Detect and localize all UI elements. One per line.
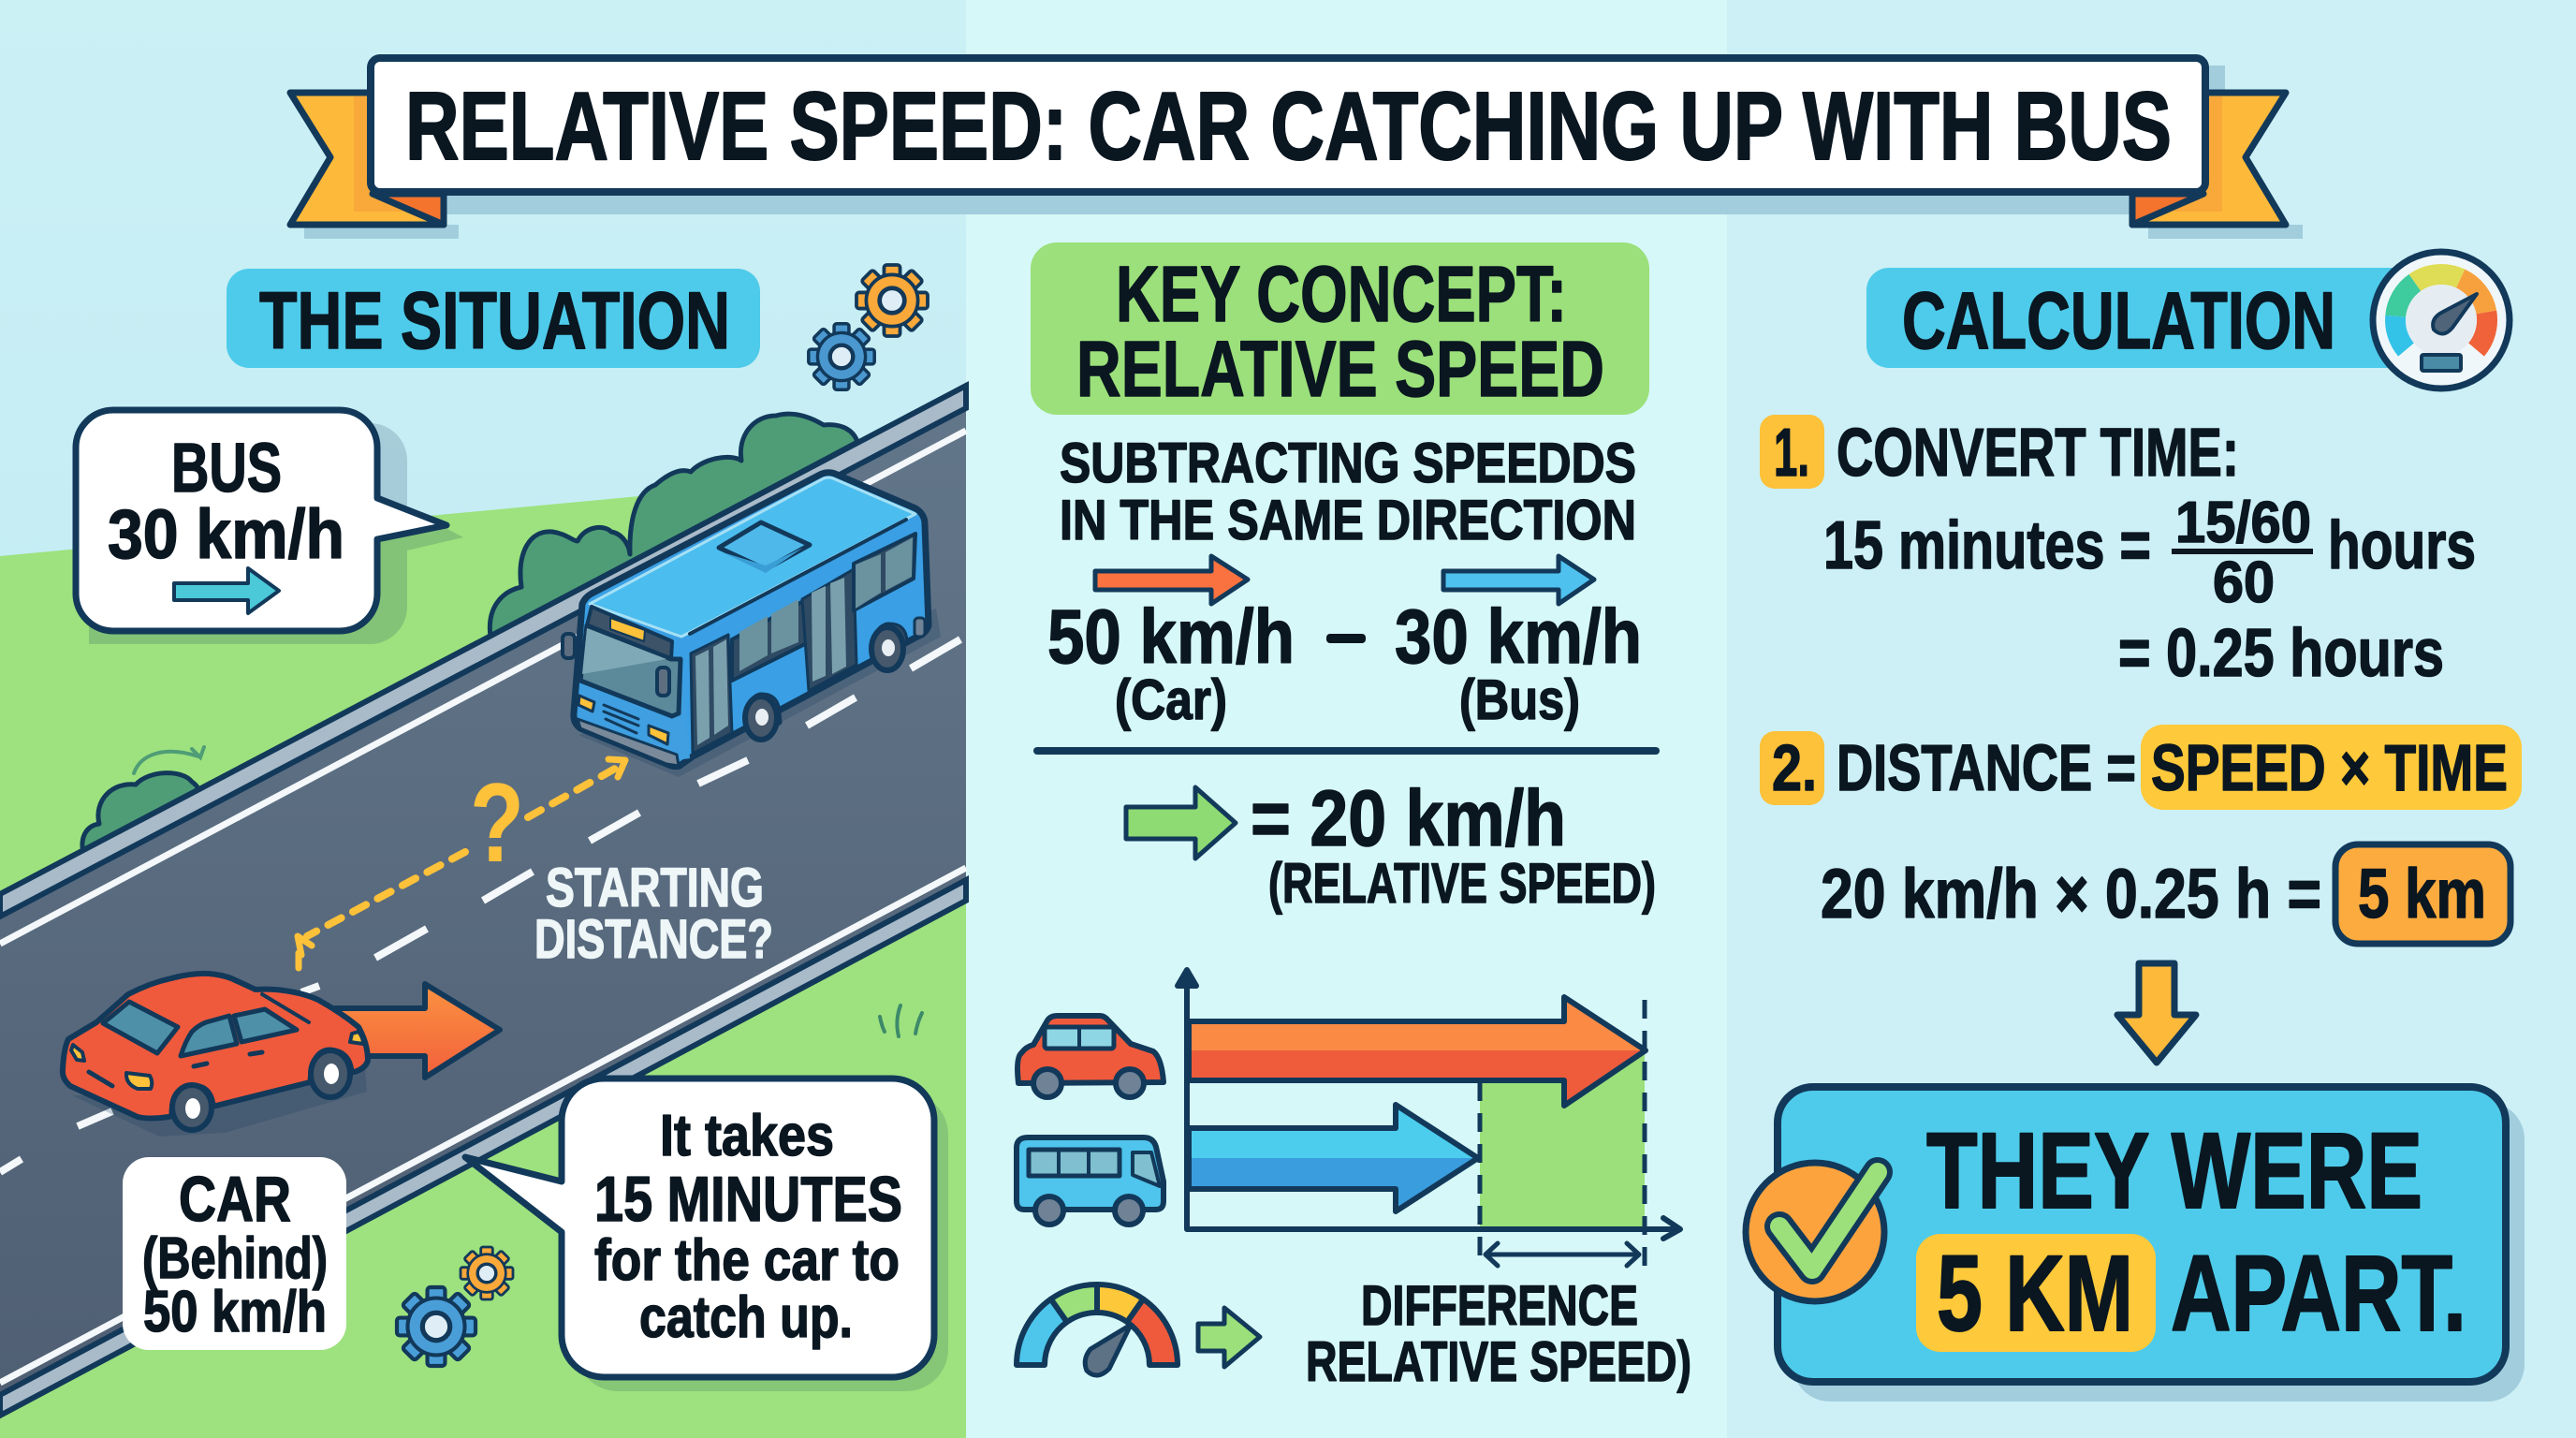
formula: speed subtraction — [1047, 594, 1642, 731]
callout bubble — [76, 410, 446, 631]
time conversion fraction: 15 minutes = — [1823, 508, 2151, 583]
question mark: ? — [470, 760, 524, 886]
icon: gauge — [1017, 1284, 1178, 1375]
step 1: convert time: 1. — [1774, 416, 1809, 491]
bus middle door — [802, 569, 856, 691]
result box — [1778, 1087, 2506, 1382]
highlight: speed times time — [2141, 725, 2522, 810]
callout: bus speed — [76, 410, 463, 644]
icon: check badge — [1746, 1163, 1884, 1301]
heading: calculation: CALCULATION — [1902, 276, 2335, 366]
arrow: gauge to difference — [1198, 1308, 1260, 1367]
icon: gears bottom — [397, 1247, 513, 1366]
callout bubble — [465, 1078, 934, 1377]
bus body — [574, 473, 929, 767]
icon: bus — [1017, 1137, 1164, 1225]
step 1: convert time: CONVERT TIME: — [1837, 416, 2239, 491]
step 1: convert time: 15/60 — [2175, 491, 2311, 555]
bus ground shadow — [578, 609, 941, 777]
car bar — [1189, 997, 1646, 1106]
dashed guides — [1480, 1000, 1645, 1266]
car lights — [71, 1032, 363, 1089]
bus front panel — [578, 625, 690, 760]
step 1: convert time: = 0.25 hours — [2118, 616, 2444, 691]
car body — [63, 974, 368, 1118]
panel: result: APART. — [2171, 1234, 2466, 1354]
lower guardrail — [0, 880, 966, 1416]
panel: result: 5 KM — [1937, 1234, 2133, 1354]
bus rear windows — [854, 534, 915, 610]
icon: car — [1017, 1016, 1164, 1097]
road surface — [0, 409, 966, 1395]
bus bumper — [578, 719, 679, 766]
heading: key concept: KEY CONCEPT: — [1116, 250, 1567, 338]
step 1: convert time: hours — [2328, 508, 2476, 583]
road edge lines — [0, 431, 966, 1383]
label: starting distance: DISTANCE? — [534, 909, 773, 970]
text: subtracting speeds: IN THE SAME DIRECTION — [1060, 489, 1636, 551]
step 2 badge — [1760, 731, 1824, 805]
step 2: distance formula: DISTANCE = — [1837, 731, 2136, 804]
icon: green arrow — [1126, 787, 1236, 858]
result: relative speed: (RELATIVE SPEED) — [1268, 852, 1656, 915]
arrow: car speed — [1095, 556, 1248, 604]
step 2 working: 5 km — [2358, 855, 2486, 932]
formula: speed subtraction: 50 km/h — [1047, 594, 1295, 680]
label: difference relative speed: DIFFERENCE — [1361, 1274, 1638, 1337]
centre dashes — [0, 639, 960, 1172]
callout: catch-up time: 15 MINUTES — [594, 1164, 902, 1235]
illustration: bus — [563, 473, 941, 777]
right ribbon — [2132, 93, 2286, 225]
callout shadow — [576, 1093, 948, 1391]
difference span arrow — [1486, 1243, 1639, 1266]
bus front door — [691, 635, 732, 754]
left ribbon — [290, 93, 444, 225]
bus wheels — [745, 624, 907, 740]
bus mirrors — [563, 634, 669, 696]
car hood line — [262, 994, 309, 1022]
car side windows — [181, 1016, 237, 1056]
label: starting distance: STARTING — [546, 858, 764, 918]
bus label: BUS — [171, 429, 282, 506]
result: relative speed: = 20 km/h — [1251, 774, 1566, 862]
callout: catch-up time: It takes — [660, 1104, 834, 1168]
answer box — [2335, 844, 2510, 944]
step 1: convert time — [1760, 415, 2476, 691]
car wheels — [170, 1049, 353, 1130]
upper guardrail — [0, 386, 966, 917]
bus roof hatch — [719, 522, 810, 573]
formula: speed subtraction: (Bus) — [1459, 668, 1580, 731]
text: subtracting speeds — [1060, 432, 1636, 551]
bus grille — [604, 705, 638, 733]
bus bar — [1189, 1105, 1478, 1211]
result text: THEY WERE — [1926, 1111, 2422, 1231]
label: starting distance — [534, 858, 773, 970]
panel: result — [1746, 1087, 2525, 1401]
chart: speed difference — [1178, 970, 1680, 1266]
bus front windows — [732, 599, 807, 681]
step 2: distance formula: 2. — [1772, 731, 1817, 804]
car rear window — [103, 1002, 178, 1053]
heading: key concept: RELATIVE SPEED — [1076, 325, 1604, 413]
bush: behind bus — [490, 414, 857, 637]
label: difference relative speed: RELATIVE SPEED) — [1306, 1330, 1691, 1393]
arrow: bus speed — [1443, 556, 1594, 604]
car trim — [89, 1052, 262, 1086]
car shadow — [72, 1067, 367, 1137]
bus rear light — [915, 618, 925, 637]
callout: catch-up time — [465, 1078, 948, 1391]
heading: key concept — [1031, 242, 1649, 415]
label: car behind: 50 km/h — [143, 1280, 327, 1344]
lower grass — [0, 889, 966, 1438]
step 2: distance formula — [1760, 725, 2522, 810]
result shadow — [1793, 1102, 2525, 1401]
banner plate — [371, 58, 2205, 192]
title banner — [290, 58, 2303, 239]
bus roof line — [690, 520, 906, 634]
distance marker: dashed question — [298, 759, 625, 968]
highlight: 5 km — [1916, 1234, 2156, 1352]
difference region — [1480, 1053, 1645, 1229]
step 2 working — [1821, 844, 2510, 944]
bush: behind car — [82, 747, 204, 857]
icon: speedometer — [2373, 252, 2510, 389]
bus lights — [578, 696, 668, 744]
result: relative speed — [1126, 774, 1656, 915]
label: difference relative speed — [1306, 1274, 1691, 1393]
label: car behind: (Behind) — [142, 1226, 328, 1291]
formula: speed subtraction: 30 km/h — [1395, 594, 1642, 680]
arrow: down to result — [2117, 963, 2196, 1063]
callout shadow — [89, 423, 463, 644]
callout: catch-up time: for the car to — [594, 1228, 900, 1293]
illustration: car — [63, 974, 368, 1137]
panel: the situation road scene — [0, 386, 966, 1438]
icon: bus direction arrow — [174, 568, 279, 613]
label: car behind — [123, 1157, 346, 1350]
bus roof — [590, 477, 915, 637]
upper grass hill — [0, 393, 966, 908]
bus speed: 30 km/h — [108, 495, 344, 573]
formula: speed subtraction: (Car) — [1115, 668, 1227, 731]
step 1 badge — [1760, 415, 1824, 489]
step 2 working: 20 km/h × 0.25 h = — [1821, 855, 2321, 932]
grass tuft — [880, 1005, 922, 1036]
axes — [1178, 970, 1680, 1239]
arrow: car direction — [335, 984, 500, 1078]
text: subtracting speeds: SUBTRACTING SPEEDDS — [1060, 432, 1636, 494]
step 1: convert time: 60 — [2213, 550, 2275, 615]
label: car behind: CAR — [179, 1164, 291, 1235]
icon: gears top — [809, 265, 928, 389]
banner shadow — [304, 66, 2303, 239]
bus destination band — [587, 607, 672, 659]
heading: the situation: THE SITUATION — [259, 276, 730, 366]
callout: catch-up time: catch up. — [639, 1285, 853, 1350]
bus windshield — [580, 625, 681, 716]
